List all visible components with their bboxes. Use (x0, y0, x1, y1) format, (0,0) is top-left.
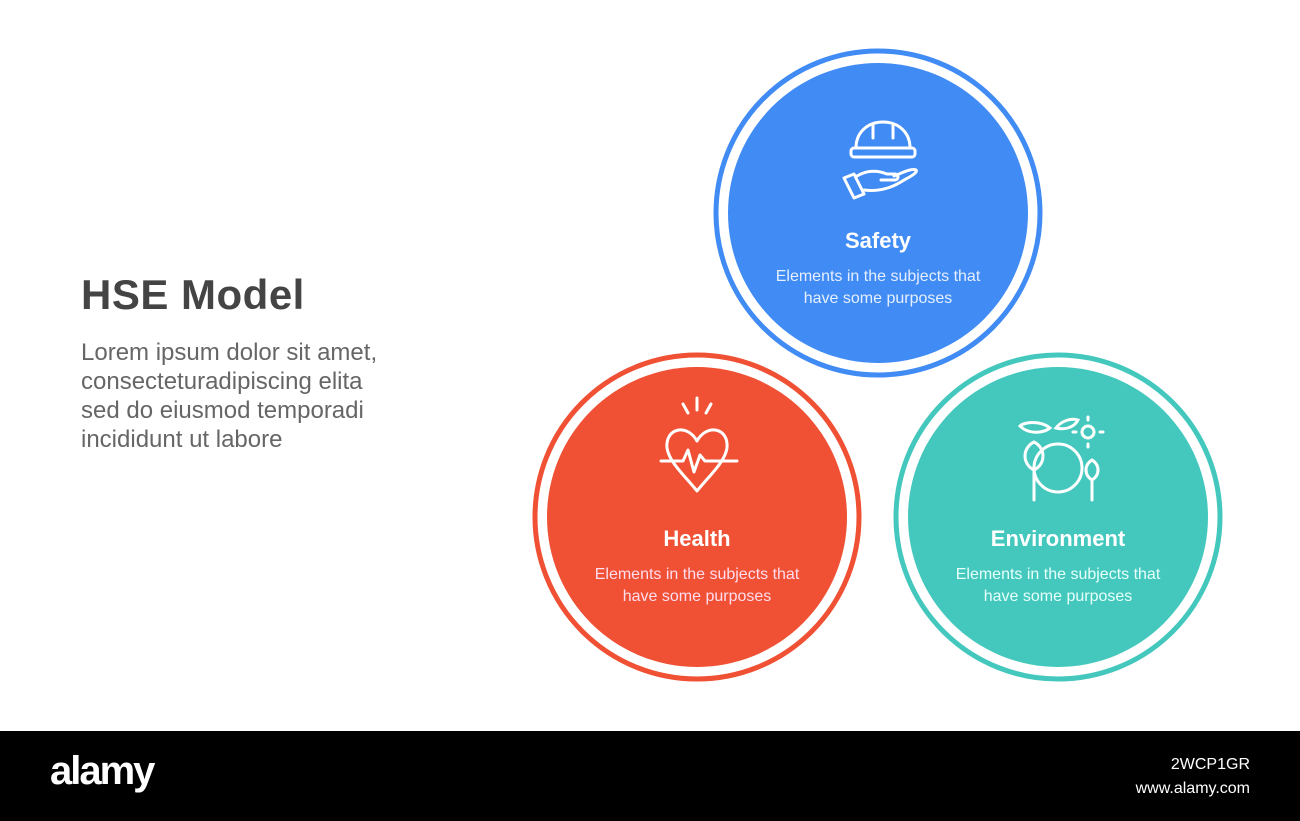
description text: consecteturadipiscing elita (81, 368, 362, 395)
footer id: 2WCP1GR (1171, 756, 1250, 773)
circle: health (535, 355, 859, 679)
description text: sed do eiusmod temporadi (81, 397, 364, 424)
circle: safety: Safety (845, 228, 912, 253)
footer logo: alamy (50, 749, 153, 793)
circle: health: Health (663, 526, 731, 551)
circle: safety: have some purposes (804, 290, 952, 307)
circle: environment (896, 355, 1220, 679)
icon: heart (661, 398, 737, 491)
icon: helmet in hand (844, 122, 916, 198)
description text: incididunt ut labore (81, 426, 282, 453)
description text (81, 339, 377, 453)
footer id (1136, 756, 1250, 797)
circle: health: have some purposes (623, 588, 771, 605)
circle: environment: have some purposes (984, 588, 1132, 605)
footer bar (0, 731, 1300, 821)
circle: safety (716, 51, 1040, 375)
circle: health: Elements in the subjects that (595, 566, 800, 583)
circle: environment: Elements in the subjects that (956, 566, 1161, 583)
footer id: www.alamy.com (1136, 780, 1250, 797)
icon: globe with plants (1020, 417, 1103, 500)
title: HSE Model (81, 271, 305, 318)
circle: safety: Elements in the subjects that (776, 268, 981, 285)
circle: environment: Environment (991, 526, 1126, 551)
description text: Lorem ipsum dolor sit amet, (81, 339, 377, 366)
